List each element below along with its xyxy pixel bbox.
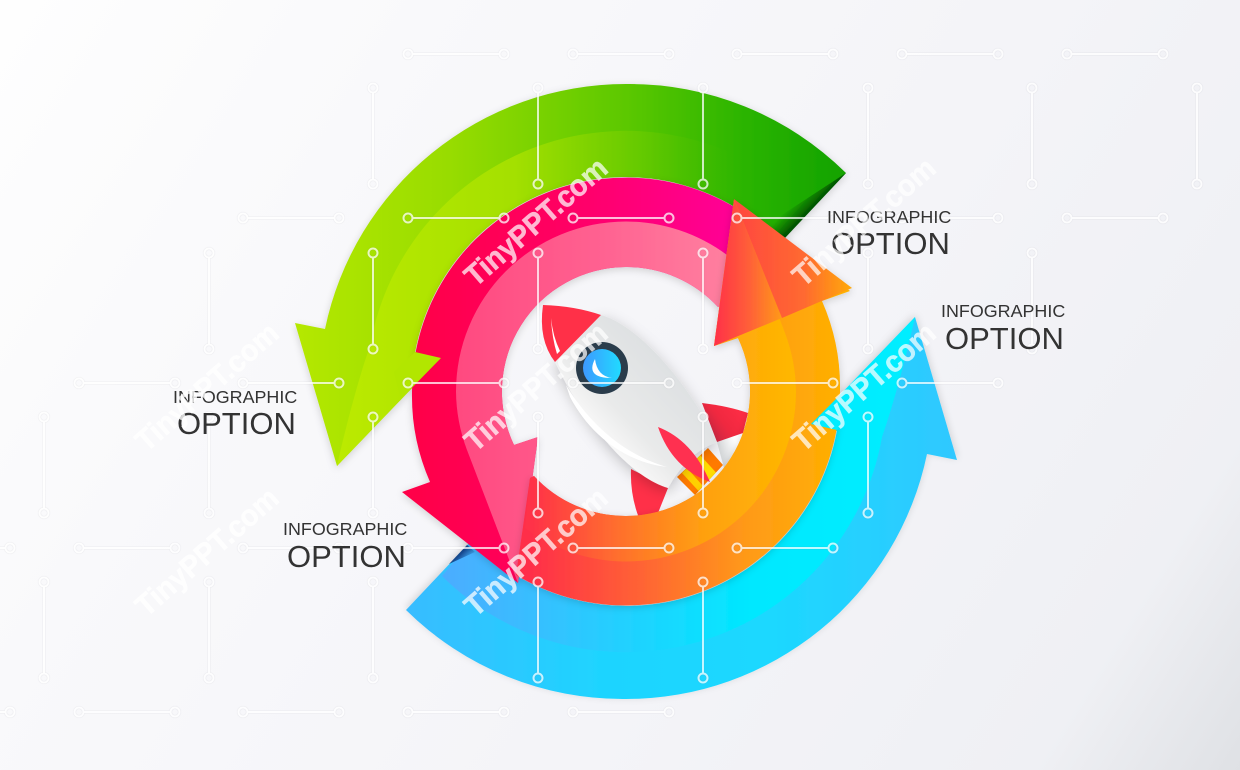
label: left option: INFOGRAPHIC: [173, 387, 297, 407]
arrow: green outer: [295, 84, 846, 466]
watermarks: [129, 152, 942, 623]
ring arrow: orange and red: [516, 199, 852, 605]
arrow: blue outer: [406, 317, 957, 699]
rocket nose: [542, 305, 601, 362]
rocket fin: lower left: [631, 469, 668, 518]
label: top right option: OPTION: [831, 226, 950, 261]
label: right option: INFOGRAPHIC: [941, 301, 1065, 321]
watermarks: TinyPPT.com: [458, 152, 614, 293]
green arrow notch over ring: [394, 352, 441, 399]
watermarks: TinyPPT.com: [786, 317, 942, 458]
label: bottom left option: INFOGRAPHIC: [283, 519, 407, 539]
watermarks: TinyPPT.com: [458, 317, 614, 458]
icon: rocket: [542, 305, 750, 518]
label: top right option: [827, 207, 951, 261]
rocket rear plate: [717, 428, 750, 468]
rocket body: [555, 315, 717, 488]
rocket nose highlight: [551, 318, 560, 354]
label: right option: OPTION: [945, 321, 1064, 356]
watermarks: TinyPPT.com: [458, 482, 614, 623]
watermarks: TinyPPT.com: [786, 152, 942, 293]
watermarks: TinyPPT.com: [129, 317, 285, 458]
label: bottom left option: [283, 519, 407, 574]
label: left option: [173, 387, 297, 441]
rocket fin: upper right: [702, 403, 748, 442]
rocket rear plate lower: [660, 488, 695, 515]
label: top right option: INFOGRAPHIC: [827, 207, 951, 227]
rocket body highlight: [566, 385, 667, 467]
rocket window: [576, 342, 628, 394]
label: left option: OPTION: [177, 406, 296, 441]
label: right option: [941, 301, 1065, 356]
watermarks: TinyPPT.com: [129, 482, 285, 623]
label: bottom left option: OPTION: [287, 539, 406, 574]
ring arrow: red and pink: [402, 178, 736, 583]
rocket exhaust stripes: [677, 448, 723, 495]
rocket centre fin: [658, 427, 710, 482]
blue arrow notch over ring: [811, 384, 858, 430]
